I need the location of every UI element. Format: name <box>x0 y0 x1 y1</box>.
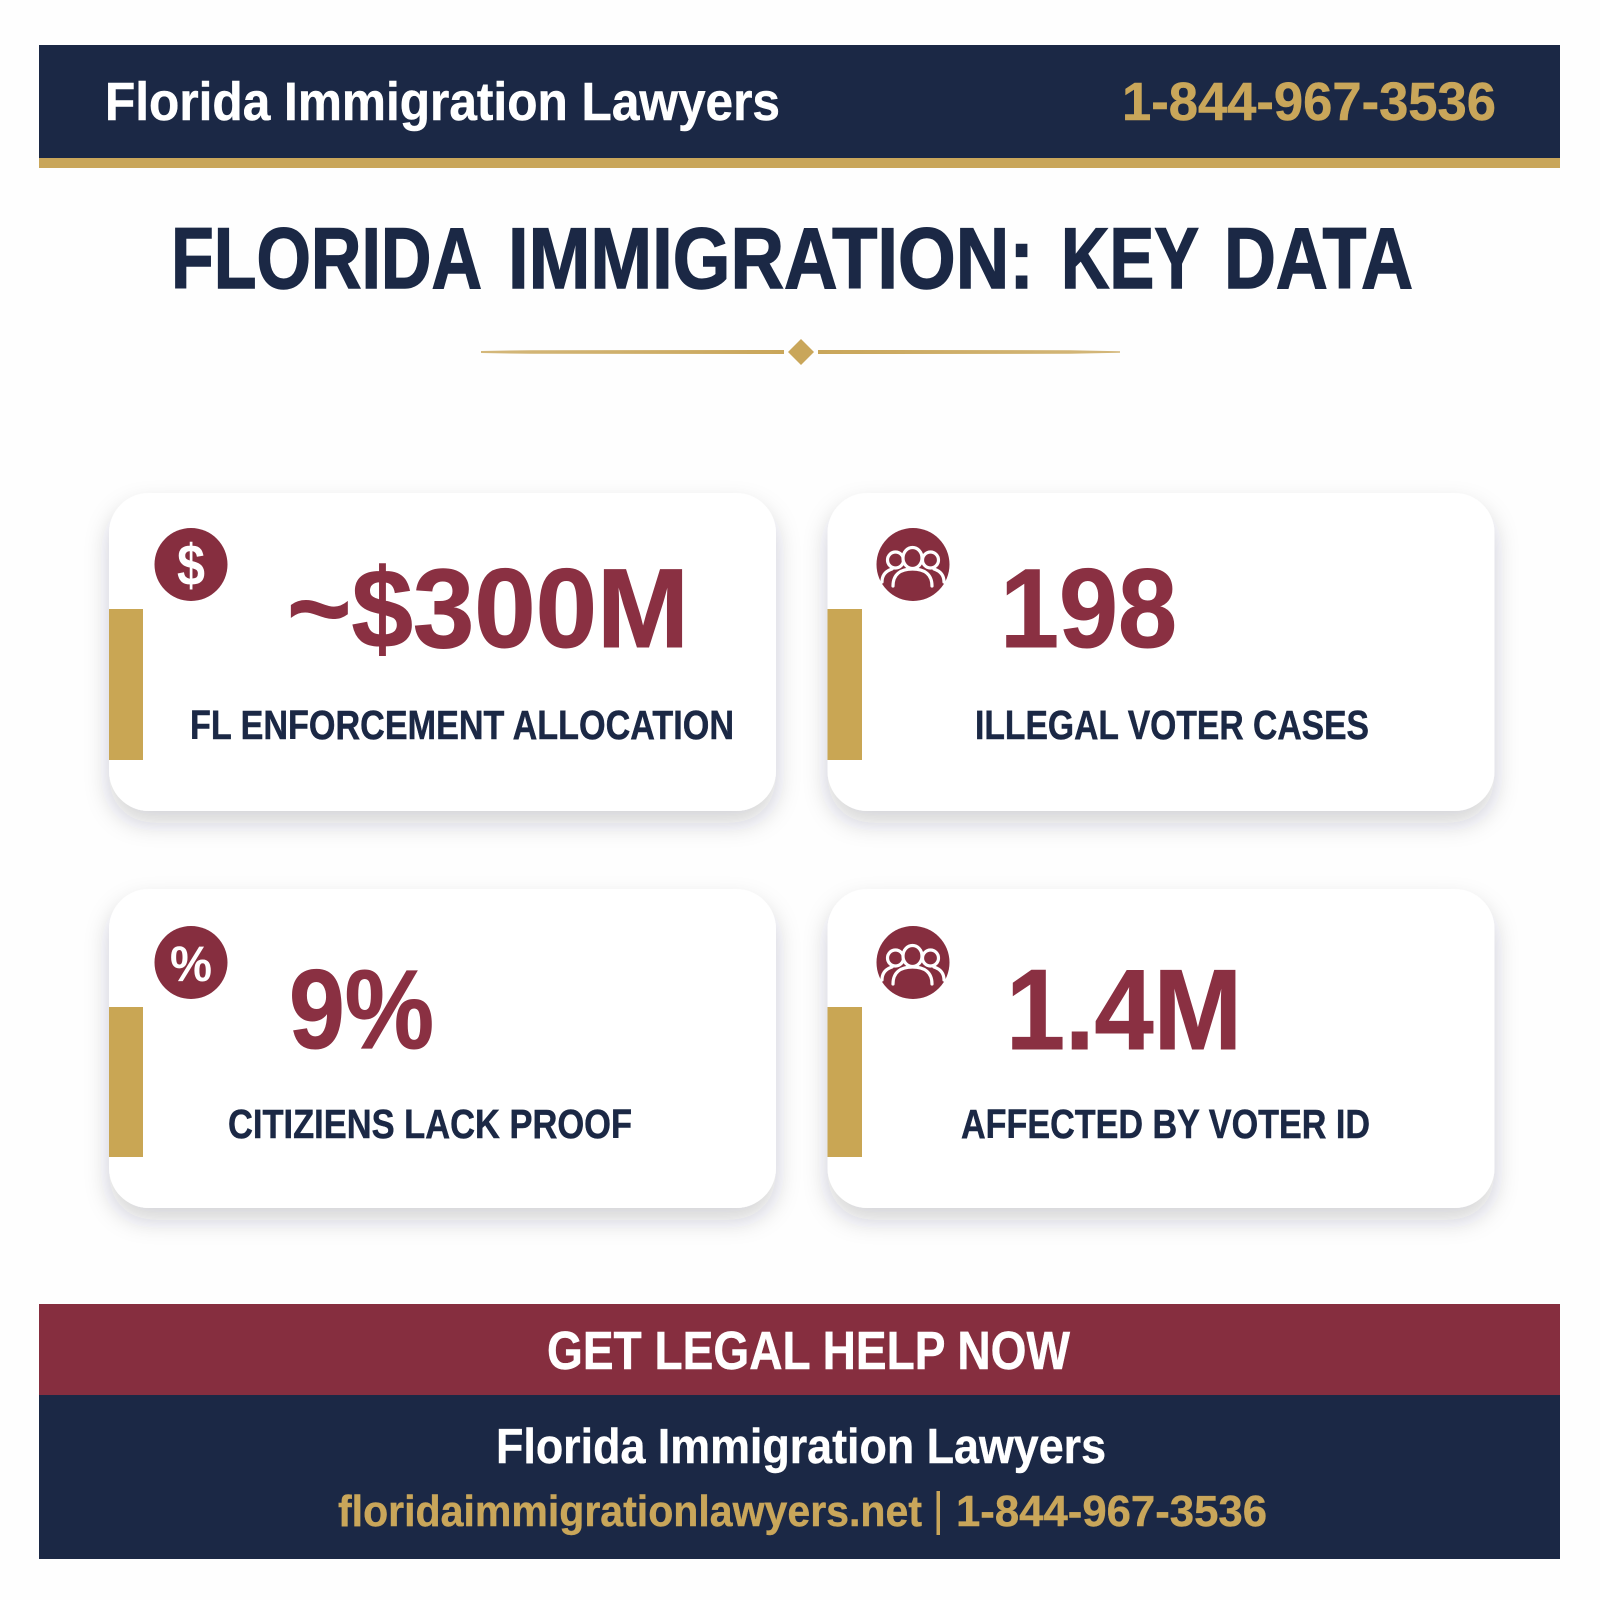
gold accent bar <box>828 609 862 760</box>
stat label: ILLEGAL VOTER CASES <box>975 702 1369 748</box>
header band <box>39 45 1560 168</box>
call to action banner <box>39 1304 1560 1395</box>
title: IMMIGRATION: <box>508 211 1034 307</box>
call to action text: GET LEGAL HELP NOW <box>547 1321 1070 1381</box>
gold accent bar <box>109 609 143 760</box>
panel: illegal voter cases <box>828 493 1494 811</box>
panel: citizens lack proof <box>109 889 776 1208</box>
stat label: FL ENFORCEMENT ALLOCATION <box>190 702 734 748</box>
icon: dollar: $ <box>177 533 205 598</box>
header phone number: 1-844-967-3536 <box>1122 72 1496 132</box>
icon: people <box>876 926 950 999</box>
title divider with diamond <box>481 339 1120 365</box>
stat label: CITIZIENS LACK PROOF <box>228 1101 632 1147</box>
title <box>171 211 1413 307</box>
panel: FL enforcement allocation <box>109 493 776 811</box>
icon: percent <box>154 926 228 999</box>
icon: people <box>876 528 950 601</box>
footer website and phone: floridaimmigrationlawyers.net <box>338 1487 922 1536</box>
stat value: 198 <box>1000 546 1177 671</box>
panel: affected by voter ID <box>828 889 1494 1208</box>
header firm name: Florida Immigration Lawyers <box>105 72 780 132</box>
title: KEY <box>1061 211 1199 307</box>
footer band <box>39 1395 1560 1559</box>
stat value: 1.4M <box>1006 947 1242 1074</box>
footer website and phone <box>338 1487 1267 1536</box>
footer website and phone: 1-844-967-3536 <box>956 1487 1267 1536</box>
icon: dollar <box>154 528 228 601</box>
icon: percent: % <box>170 936 212 992</box>
gold accent bar <box>109 1007 143 1157</box>
title: FLORIDA <box>171 211 482 307</box>
stat value: 9% <box>289 947 434 1072</box>
stat label: AFFECTED BY VOTER ID <box>961 1101 1370 1147</box>
title: DATA <box>1224 211 1413 307</box>
gold accent bar <box>828 1007 862 1157</box>
footer firm name: Florida Immigration Lawyers <box>496 1420 1106 1474</box>
stat value: ~$300M <box>287 546 689 671</box>
